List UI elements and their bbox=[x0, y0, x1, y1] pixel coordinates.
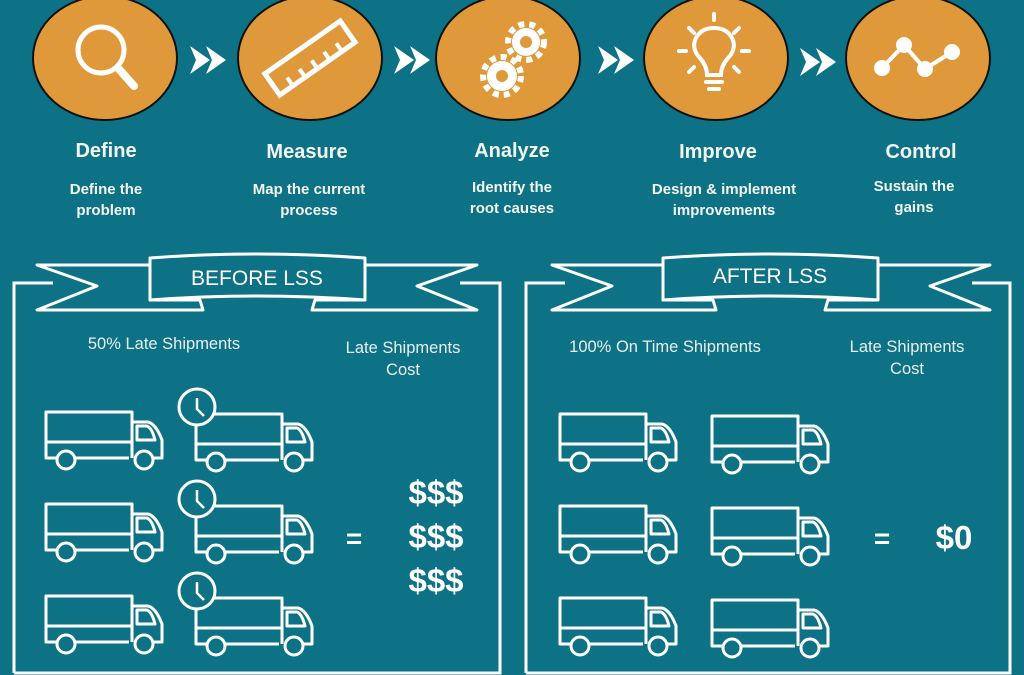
desc: measure: Map the current bbox=[253, 181, 365, 198]
arrow 1 bbox=[190, 46, 226, 74]
label: cost after: Cost bbox=[890, 360, 924, 378]
desc: control: Sustain the bbox=[874, 178, 954, 195]
desc: define: problem bbox=[76, 202, 136, 219]
label: cost after: Late Shipments bbox=[850, 338, 964, 356]
heading: Improve: Improve bbox=[679, 141, 757, 163]
equals and cost: $$$ bbox=[408, 474, 464, 511]
desc: analyze: root causes bbox=[470, 200, 554, 217]
icon: bulb bbox=[679, 14, 749, 89]
banner: after bbox=[552, 254, 990, 310]
equals and cost: $$$ bbox=[408, 518, 464, 555]
equals and cost: = bbox=[346, 523, 362, 554]
desc: improve: improvements bbox=[673, 202, 775, 219]
desc: control: gains bbox=[894, 199, 934, 216]
banner: before: BEFORE LSS bbox=[191, 267, 323, 290]
arrow 3 bbox=[598, 46, 634, 74]
label: 100% on time: 100% On Time Shipments bbox=[569, 338, 761, 356]
label: late shipments cost: Late Shipments bbox=[346, 339, 460, 357]
label: late shipments cost: Cost bbox=[386, 361, 420, 379]
trucks after bbox=[560, 414, 828, 657]
icon: magnifier bbox=[78, 27, 134, 86]
trucks before bbox=[46, 389, 312, 655]
step: analyze bbox=[436, 0, 580, 217]
arrow 2 bbox=[394, 46, 430, 74]
desc: analyze: Identify the bbox=[472, 179, 552, 196]
heading: Define: Define bbox=[75, 140, 137, 162]
banner: before bbox=[37, 254, 477, 310]
heading: Analyze: Analyze bbox=[474, 140, 550, 162]
equals zero bbox=[874, 519, 972, 556]
equals and cost bbox=[346, 474, 464, 599]
panel: after LSS bbox=[526, 254, 1010, 673]
icon: ruler bbox=[265, 21, 355, 95]
panel: before LSS bbox=[14, 254, 500, 673]
equals zero: = bbox=[874, 523, 890, 554]
desc: measure: process bbox=[280, 202, 338, 219]
icon: line chart bbox=[876, 39, 958, 75]
desc: define: Define the bbox=[70, 181, 142, 198]
equals and cost: $$$ bbox=[408, 562, 464, 599]
banner: after: AFTER LSS bbox=[713, 265, 827, 288]
icon: gears bbox=[483, 24, 544, 95]
label: 50% late: 50% Late Shipments bbox=[88, 335, 240, 353]
arrow 4 bbox=[800, 48, 836, 76]
heading: Control: Control bbox=[885, 141, 957, 163]
step: define bbox=[33, 0, 177, 219]
desc: improve: Design & implement bbox=[652, 181, 796, 198]
heading: Measure: Measure bbox=[266, 141, 348, 163]
step: control bbox=[846, 0, 990, 216]
step: measure bbox=[238, 0, 382, 219]
step: improve bbox=[644, 0, 796, 219]
equals zero: $0 bbox=[936, 519, 972, 556]
